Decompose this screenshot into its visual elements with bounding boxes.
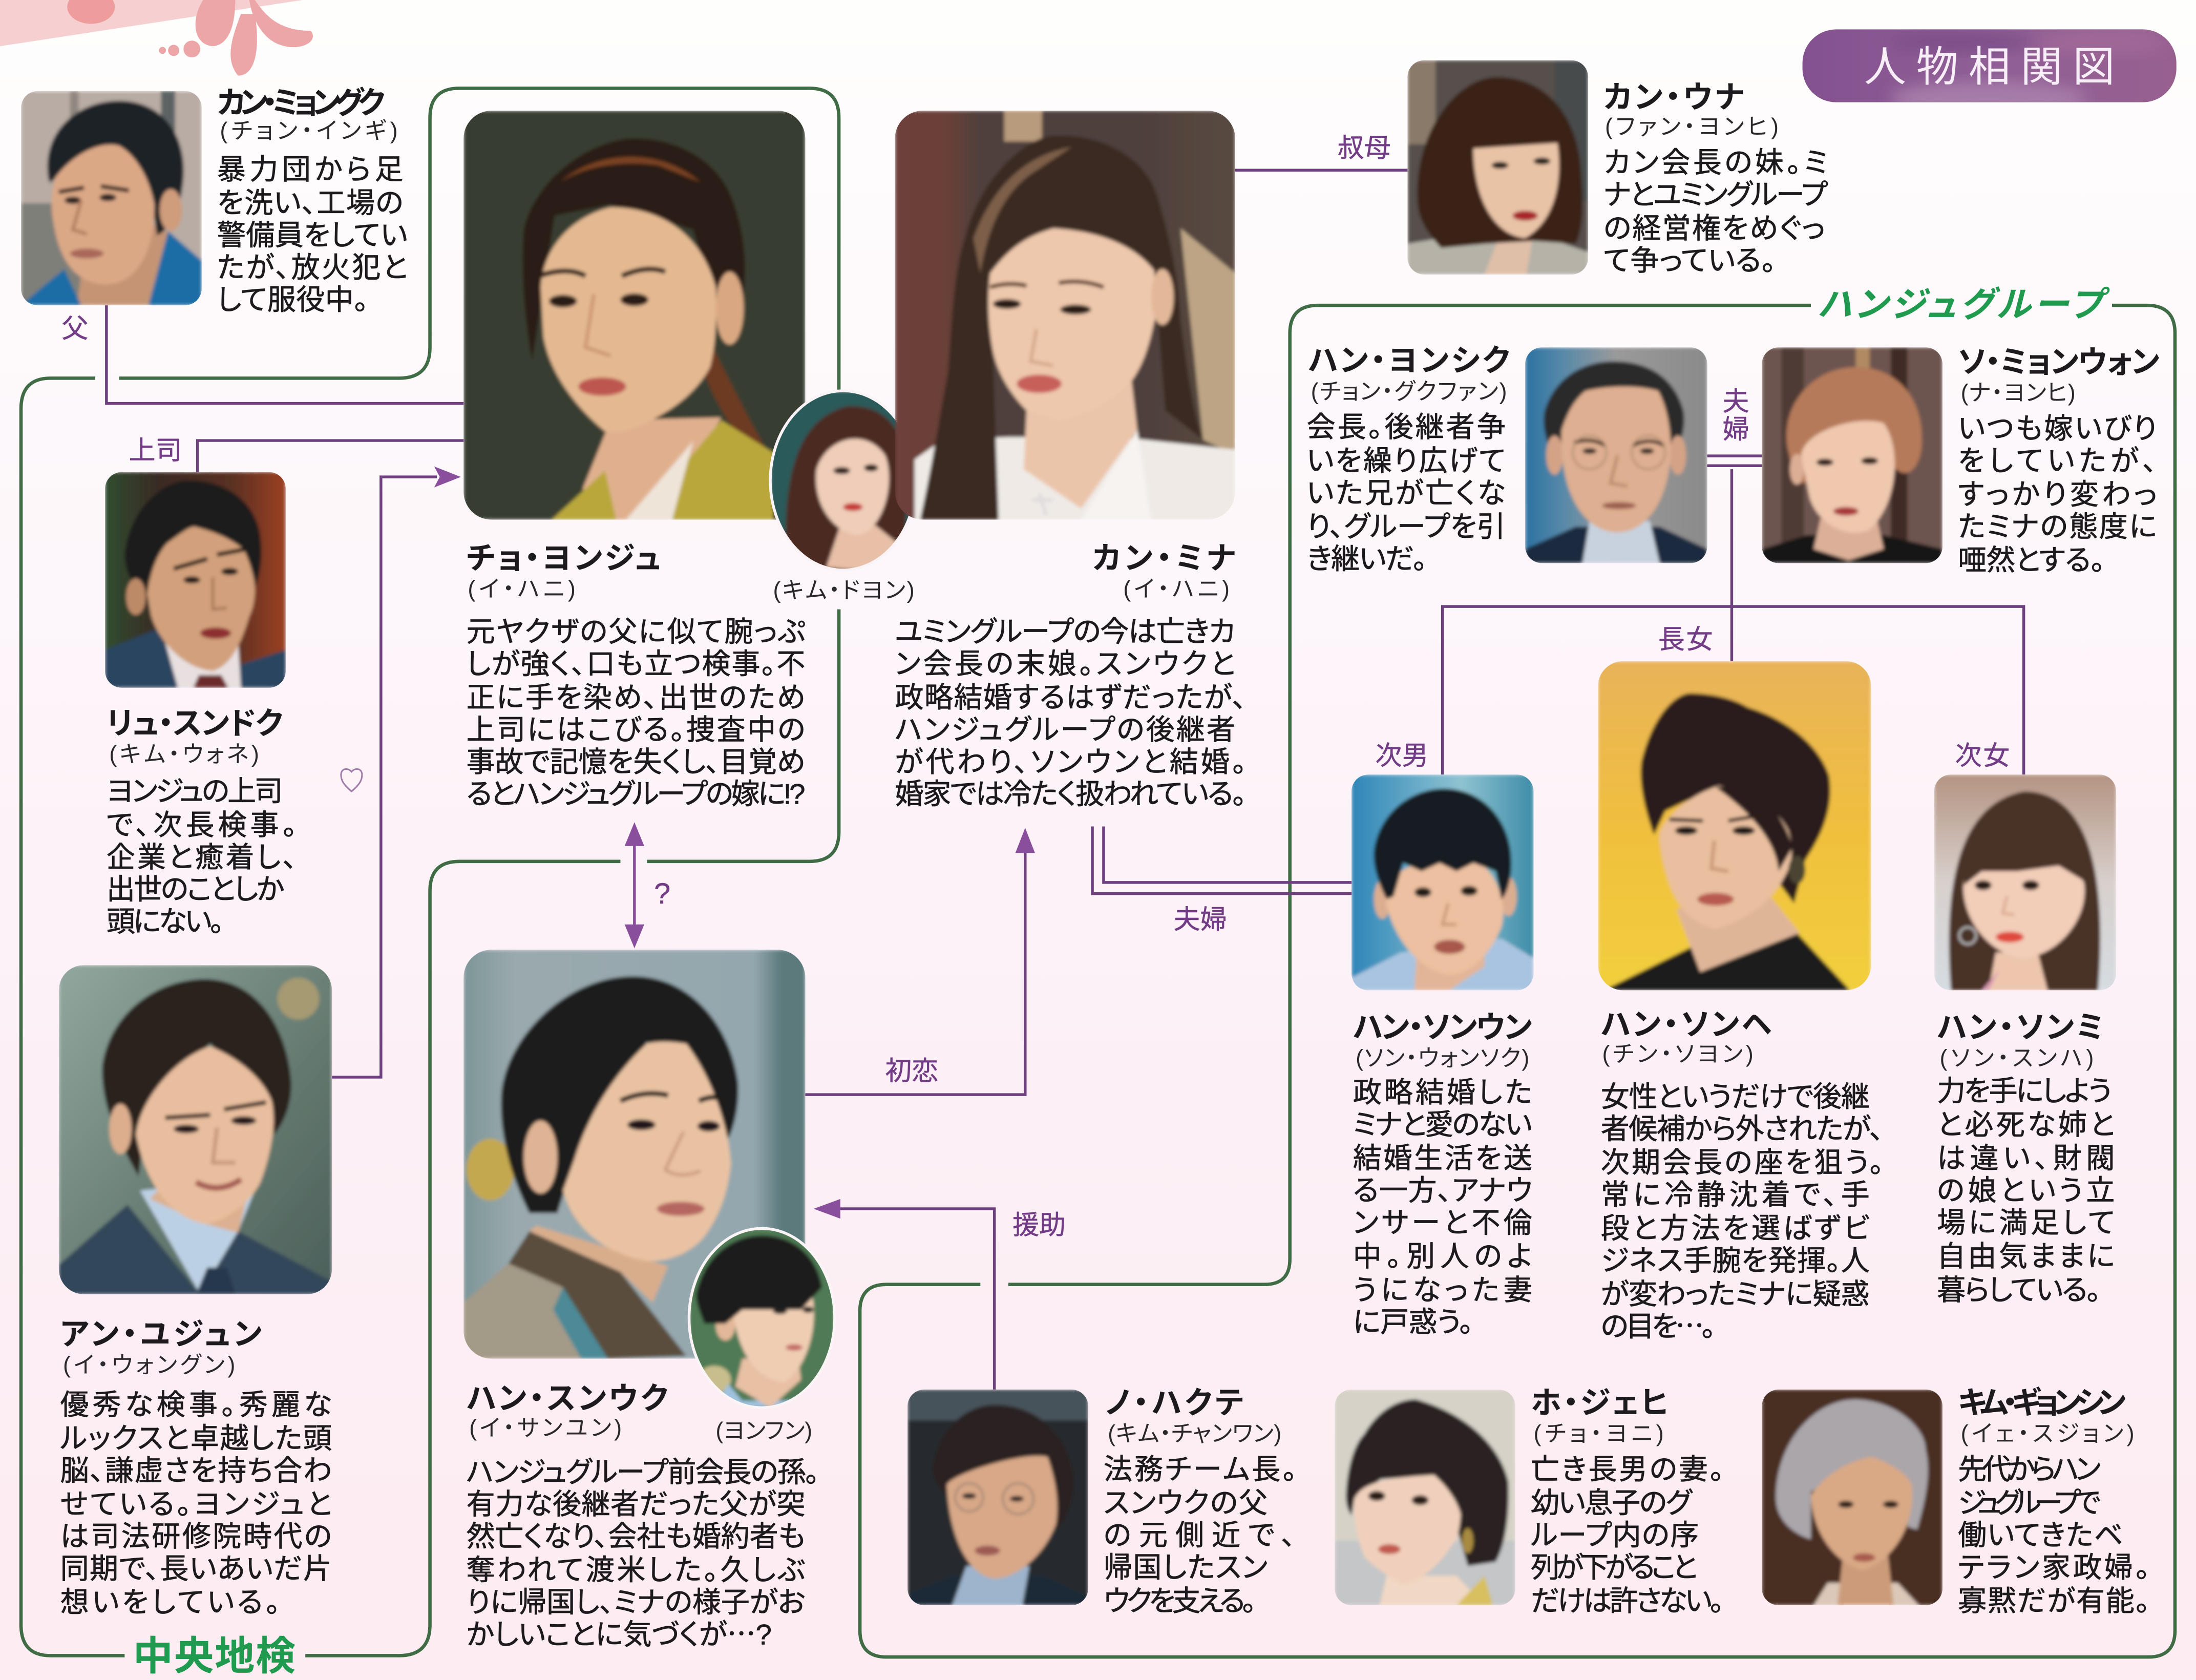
name: カン・ミョングク [217, 86, 385, 120]
description: 優秀な検事。秀麗な [60, 1389, 332, 1421]
actor: (ソン・スンハ) [1940, 1045, 2094, 1071]
description: 元ヤクザの父に似て腕っぷ [467, 615, 805, 647]
actor: (チン・ソヨン) [1602, 1041, 1754, 1067]
name: ハン・ソンウン [1353, 1010, 1532, 1044]
description: る一方、アナウ [1353, 1174, 1532, 1207]
photo: ハン・ヨンシク [1525, 347, 1707, 563]
photo: ハン・ソンミ [1934, 774, 2116, 990]
relation: family tree to children: 長女 [1658, 625, 1713, 655]
description: 中。別人のよ [1353, 1240, 1532, 1272]
description: 帰国したスン [1104, 1551, 1268, 1583]
description: ヨンジュの上司 [107, 775, 283, 807]
photo: ホ・ジェヒ [1335, 1390, 1515, 1605]
description: 政略結婚した [1353, 1076, 1532, 1108]
description: 自由気ままに [1937, 1240, 2115, 1272]
description: 会長。後継者争 [1306, 411, 1506, 443]
photo: ノ・ハクテ [907, 1390, 1088, 1605]
description: 亡き長男の妻。 [1531, 1453, 1724, 1485]
description [217, 153, 408, 316]
inset photo: キム・ドヨン [769, 389, 917, 574]
relation: family tree to children: 次男 [1375, 741, 1428, 771]
description: 者候補から外されたが、 [1601, 1112, 1884, 1145]
description [1104, 1453, 1297, 1617]
description: が代わり、ソンウンと結婚。 [895, 746, 1247, 778]
description: に戸惑う。 [1353, 1306, 1473, 1338]
decoration: pink floral corner [0, 0, 313, 76]
description: ハンジュグループの後継者 [895, 713, 1235, 746]
name: ハン・ヨンシク [1308, 344, 1510, 378]
panel: アン・ユジュン [59, 965, 332, 1619]
photo: カン・ミョングク [21, 91, 202, 305]
relation: 初恋: 初恋 [885, 1056, 938, 1086]
description: ジュグループで [1958, 1486, 2101, 1519]
description: ジネス手腕を発揮。人 [1601, 1244, 1870, 1276]
relation: double arrow with question mark [625, 822, 670, 948]
panel: ソ・ミョンウォン [1762, 345, 2160, 576]
panel: キム・ギョンシン [1762, 1385, 2150, 1617]
description: 次期会長の座を狙う。 [1601, 1146, 1884, 1179]
relation: 父 [61, 305, 463, 404]
actor: (イ・ハニ) [1123, 576, 1230, 602]
description [1958, 412, 2157, 576]
description [467, 615, 805, 810]
description: ルックスと卓越した頭 [60, 1422, 332, 1455]
panel: ノ・ハクテ [907, 1385, 1297, 1617]
actor: (イェ・スジョン) [1961, 1420, 2135, 1446]
relation: 上司 [129, 436, 463, 472]
panel: ハン・スンウク [463, 950, 836, 1653]
actor: (イ・ハニ) [468, 576, 576, 602]
photo: ハン・ソンヘ [1598, 661, 1871, 990]
description [1937, 1075, 2115, 1306]
description: いを繰り広げて [1306, 445, 1506, 477]
arrow: アン・ユジュン to チョ・ヨンジュ [332, 467, 461, 1077]
description: 唖然とする。 [1958, 544, 2105, 576]
description: ン会長の末娘。スンウクと [895, 647, 1235, 680]
description: 列が下がること [1531, 1551, 1697, 1583]
relation: 援助: 援助 [1012, 1210, 1066, 1240]
description: カン会長の妹。ミ [1603, 146, 1828, 178]
name: ノ・ハクテ [1105, 1385, 1243, 1420]
description: 正に手を染め、出世のため [467, 681, 805, 713]
actor: (ナ・ヨンヒ) [1961, 380, 2076, 406]
description: 政略結婚するはずだったが、 [895, 681, 1247, 713]
relation: family tree to children [1375, 469, 2024, 774]
description: 女性というだけで後継 [1601, 1080, 1870, 1112]
description: 警備員をしてい [217, 219, 408, 251]
description: 段と方法を選ばずビ [1601, 1212, 1870, 1244]
description: 法務チーム長。 [1104, 1453, 1297, 1485]
description: かしいことに気づくが…? [467, 1612, 772, 1653]
photo: キム・ギョンシン [1762, 1390, 1942, 1605]
actor: (チョン・グクファン) [1311, 378, 1507, 404]
title badge: 人物相関図 [1803, 29, 2177, 102]
description: は違い、財閥 [1937, 1142, 2115, 1174]
description: るとハンジュグループの嫁に!? [467, 778, 805, 810]
photo: アン・ユジュン [59, 965, 332, 1294]
description [1603, 146, 1828, 277]
description: ハンジュグループ前会長の孫。 [467, 1456, 819, 1488]
name: カン・ミナ [1092, 541, 1235, 575]
description: 上司にはこびる。捜査中の [467, 713, 805, 746]
description [1531, 1453, 1724, 1617]
panel: ハン・ソンヘ [1598, 661, 1884, 1345]
actor: (チョン・インギ) [220, 118, 398, 144]
relation: 上司: 上司 [129, 436, 182, 466]
panel: ハン・ソンウン [1352, 774, 1533, 1338]
label: ハンジュグループ: ハンジュグループ [1818, 285, 2110, 324]
description: だけは許さない。 [1531, 1585, 1724, 1617]
description: 然亡くなり、会社も婚約者も [467, 1520, 805, 1552]
description: たミナの態度に [1958, 510, 2157, 542]
description: たが、放火犯と [217, 251, 408, 283]
relation: 夫婦 会長夫妻 [1707, 387, 1762, 466]
description [60, 1389, 332, 1619]
actor: (イ・サンユン) [469, 1415, 622, 1441]
description: 婚家では冷たく扱われている。 [895, 778, 1247, 810]
relation: 夫婦 カン・ミナとソンウン [1092, 826, 1352, 935]
description: ループ内の序 [1531, 1519, 1699, 1551]
relation: 初恋 [805, 828, 1035, 1095]
description: は司法研修院時代の [60, 1520, 332, 1552]
description: 有力な後継者だった父が突 [467, 1488, 805, 1520]
name: ハン・ソンヘ [1601, 1007, 1771, 1042]
actor: (ソン・ウォンソク) [1356, 1045, 1529, 1071]
description: りに帰国し、ミナの様子がお [467, 1586, 805, 1619]
description: 暮らしている。 [1937, 1274, 2101, 1306]
description: ナとユミングループ [1603, 178, 1828, 211]
relation: 夫婦 会長夫妻: 婦 [1723, 415, 1749, 445]
panel: ハン・ヨンシク [1306, 344, 1707, 575]
relation: double arrow with question mark: ? [654, 877, 670, 910]
description [107, 775, 297, 938]
description [895, 615, 1247, 810]
description: 結婚生活を送 [1353, 1142, 1532, 1174]
actor: (キム・ウォネ) [109, 741, 259, 767]
description: で、次長検事。 [107, 809, 297, 841]
description: ミナと愛のない [1353, 1108, 1532, 1141]
relation: 叔母: 叔母 [1338, 133, 1391, 163]
description: 奪われて渡米した。久しぶ [467, 1554, 805, 1586]
description: 出世のことしか [107, 873, 284, 906]
description [1958, 1453, 2150, 1617]
panel: カン・ミョングク [21, 86, 408, 316]
relation: 父: 父 [61, 314, 88, 344]
name: ソ・ミョンウォン [1958, 345, 2160, 379]
description [1306, 411, 1506, 575]
name: カン・ウナ [1603, 80, 1744, 115]
description: 常に冷静沈着で、手 [1601, 1179, 1870, 1211]
description: 場に満足して [1937, 1207, 2115, 1239]
title badge: 人物相関図: 人物相関図 [1864, 44, 2115, 91]
panel: ハン・ソンミ [1934, 774, 2116, 1306]
description: 力を手にしよう [1937, 1075, 2112, 1107]
photo: ハン・スンウク [463, 950, 805, 1359]
relation: 援助 [814, 1199, 1066, 1390]
actor: (キム・チャンワン) [1108, 1420, 1281, 1446]
name: アン・ユジュン [60, 1317, 262, 1351]
description [1353, 1076, 1532, 1338]
description: 同期で、長いあいだ片 [60, 1552, 332, 1585]
description: せている。ヨンジュと [60, 1488, 332, 1520]
actor: (イ・ウォングン) [63, 1352, 235, 1378]
relation: family tree to children: 次女 [1955, 741, 2010, 771]
name: キム・ギョンシン [1958, 1385, 2126, 1420]
description: を洗い、工場の [217, 187, 404, 219]
description: 働いてきたベ [1958, 1519, 2123, 1551]
description: の元側近で、 [1104, 1519, 1296, 1551]
panel: ホ・ジェヒ [1335, 1385, 1724, 1617]
description: と必死な姉と [1937, 1108, 2115, 1141]
description: 先代からハン [1958, 1453, 2101, 1485]
description: をしていたが、 [1958, 445, 2157, 477]
description: が変わったミナに疑惑 [1601, 1278, 1870, 1310]
description: 事故で記憶を失くし、目覚め [467, 746, 805, 778]
relation: 夫婦 会長夫妻: 夫 [1723, 387, 1749, 416]
description: の経営権をめぐっ [1603, 212, 1825, 244]
relation: 夫婦 カン・ミナとソンウン: 夫婦 [1174, 905, 1227, 935]
description [467, 1456, 819, 1653]
description: て争っている。 [1603, 244, 1776, 277]
description: うになった妻 [1353, 1274, 1532, 1306]
photo: チョ・ヨンジュ [463, 111, 805, 520]
description: 暴力団から足 [217, 153, 404, 185]
actor: (チョ・ヨニ) [1533, 1420, 1664, 1446]
description: き継いだ。 [1306, 542, 1427, 575]
photo: ハン・ソンウン [1352, 774, 1533, 990]
description: いつも嫁いびり [1958, 412, 2157, 445]
panel: カン・ミナ [895, 111, 1247, 810]
description: 寡黙だが有能。 [1958, 1585, 2150, 1617]
inset actor: (キム・ドヨン) [773, 577, 915, 603]
photo: カン・ミナ [895, 111, 1235, 520]
description: スンウクの父 [1104, 1486, 1268, 1519]
photo: ソ・ミョンウォン [1762, 347, 1942, 563]
label: 中央地検: 中央地検 [133, 1633, 295, 1678]
description: して服役中。 [217, 283, 368, 316]
panel: カン・ウナ [1407, 60, 1828, 277]
inset actor: (ヨンフン) [715, 1418, 812, 1444]
description [1601, 1080, 1884, 1345]
description: の目を…。 [1601, 1304, 1716, 1345]
description: すっかり変わっ [1958, 478, 2157, 510]
photo: カン・ウナ [1407, 60, 1588, 275]
description: 頭にない。 [107, 906, 224, 938]
description: 脳、謙虚さを持ち合わ [60, 1455, 332, 1487]
actor: (ファン・ヨンヒ) [1605, 114, 1779, 140]
description: いた兄が亡くな [1306, 477, 1506, 509]
description: しが強く、口も立つ検事。不 [467, 647, 805, 680]
name: ハン・スンウク [467, 1381, 668, 1416]
description: 企業と癒着し、 [107, 841, 297, 873]
description: の娘という立 [1937, 1174, 2115, 1207]
panel: チョ・ヨンジュ [463, 111, 917, 810]
description: ンサーと不倫 [1353, 1207, 1532, 1239]
description: 幼い息子のグ [1531, 1486, 1693, 1519]
inset photo: ヨンフン [688, 1227, 836, 1411]
description: 想いをしている。 [60, 1586, 280, 1619]
icon: heart [341, 769, 362, 791]
name: リュ・スンドク [107, 706, 283, 741]
description: ウクを支える。 [1104, 1585, 1256, 1617]
description: テラン家政婦。 [1958, 1551, 2150, 1583]
description: ユミングループの今は亡きカ [895, 615, 1235, 647]
panel: リュ・スンドク [105, 472, 297, 938]
name: ハン・ソンミ [1937, 1010, 2104, 1044]
description: り、グループを引 [1306, 510, 1506, 542]
photo: リュ・スンドク [105, 472, 286, 688]
name: ホ・ジェヒ [1531, 1385, 1668, 1420]
name: チョ・ヨンジュ [467, 541, 661, 575]
